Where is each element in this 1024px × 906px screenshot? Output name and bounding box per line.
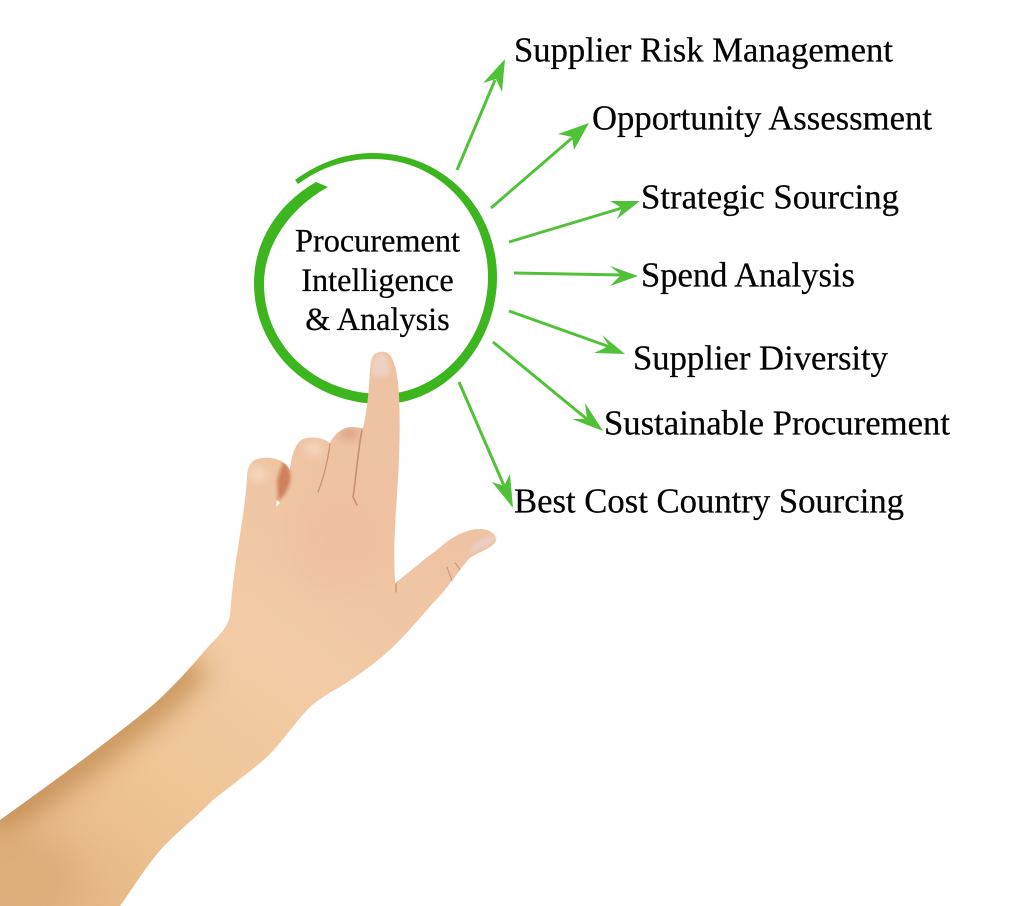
center label: Procurement bbox=[295, 223, 460, 259]
pinky knuckle shade bbox=[277, 461, 291, 501]
center label: & Analysis bbox=[305, 301, 450, 337]
arm bottom-left shade bbox=[0, 838, 75, 906]
middle knuckle shade bbox=[339, 428, 359, 440]
finger separations bbox=[318, 430, 462, 592]
label: strategic sourcing: Strategic Sourcing bbox=[641, 179, 899, 217]
label: spend analysis: Spend Analysis bbox=[641, 257, 855, 295]
arm and palm bbox=[0, 352, 496, 906]
hand pointing at the circle bbox=[0, 352, 496, 906]
thumbnail bbox=[469, 535, 495, 553]
index fingernail bbox=[372, 353, 389, 377]
arrow: sustainable procurement bbox=[493, 342, 603, 431]
gap beside little finger bbox=[276, 500, 280, 507]
label: sustainable procurement: Sustainable Procurement bbox=[604, 405, 950, 443]
center label: Intelligence bbox=[301, 262, 454, 298]
list labels bbox=[514, 32, 950, 521]
label: supplier diversity: Supplier Diversity bbox=[633, 340, 889, 378]
back of hand rosy tint bbox=[290, 490, 390, 590]
hand shading bbox=[0, 428, 462, 906]
knuckle highlights bbox=[249, 442, 324, 482]
label: best cost country sourcing: Best Cost Country Sourcing bbox=[514, 483, 904, 521]
arrows bbox=[457, 59, 640, 508]
arm upper edge shade bbox=[0, 662, 195, 825]
center label bbox=[295, 223, 460, 337]
arrow: strategic sourcing bbox=[509, 201, 640, 242]
arrow: supplier diversity bbox=[509, 311, 625, 354]
green hand-drawn circle bbox=[254, 153, 497, 404]
arrow: supplier risk management bbox=[457, 59, 505, 170]
arrow: opportunity assessment bbox=[491, 123, 589, 208]
label: opportunity assessment: Opportunity Assessment bbox=[592, 100, 932, 138]
arrow: best cost country sourcing bbox=[459, 382, 513, 508]
arrow: spend analysis bbox=[514, 266, 638, 286]
label: supplier risk management: Supplier Risk Management bbox=[514, 32, 893, 70]
